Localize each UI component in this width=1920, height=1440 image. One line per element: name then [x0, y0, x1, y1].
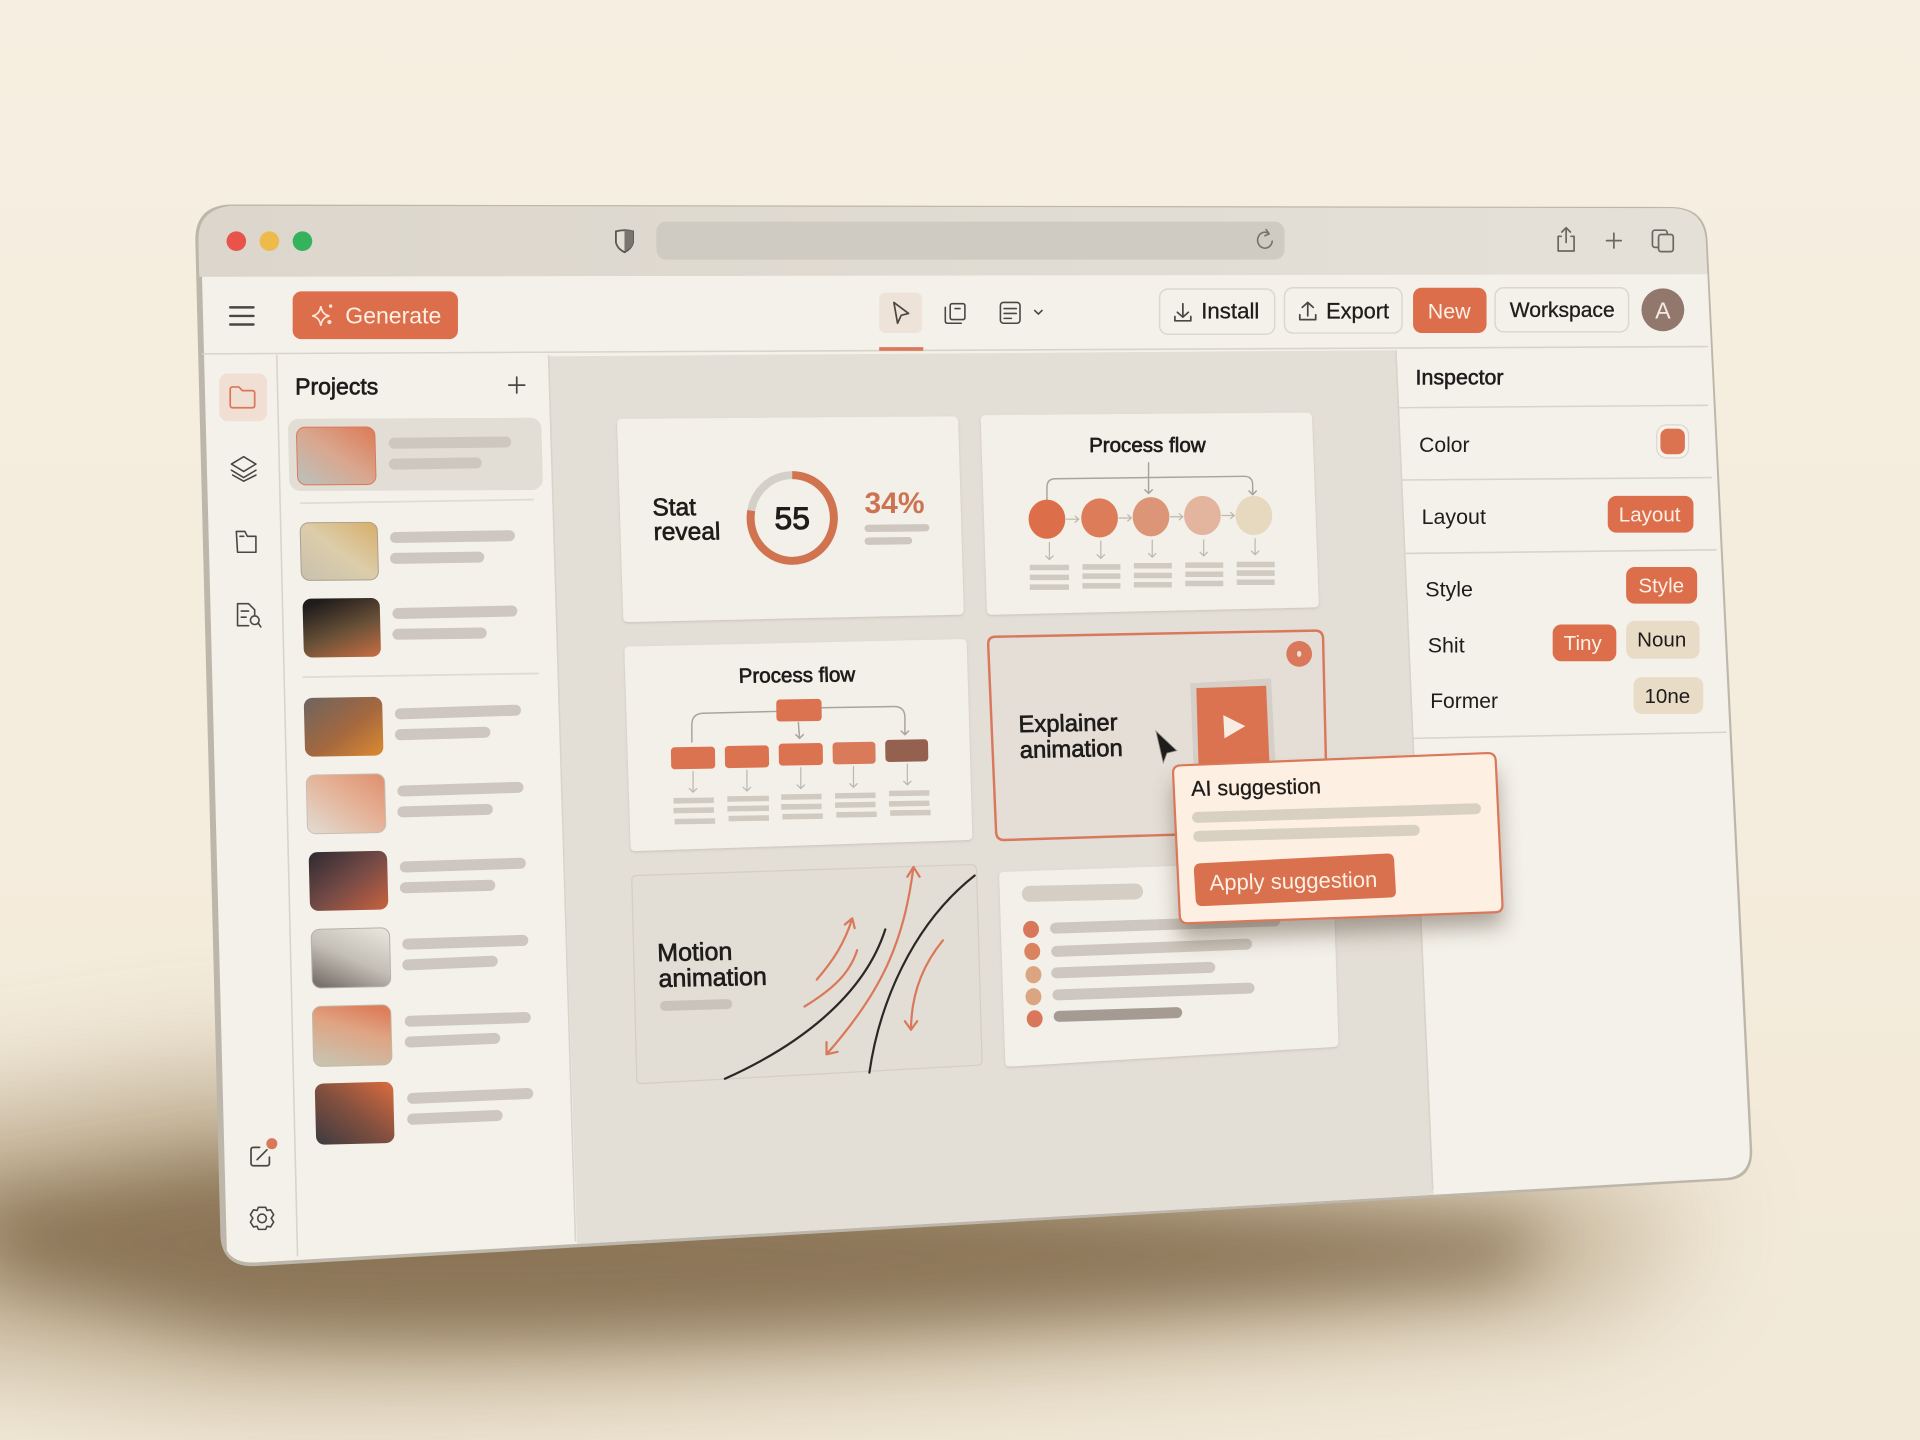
icon: add project: [509, 377, 525, 393]
former row: [1430, 677, 1703, 714]
selected project row: [288, 418, 543, 491]
heading: process flow: Process flow: [1089, 434, 1206, 457]
popup heading: AI suggestion: [1191, 774, 1321, 801]
box arrows: [689, 764, 911, 792]
canvas area: [549, 350, 1435, 1273]
popup shadow: [1173, 771, 1504, 940]
install button: Install: [1201, 298, 1259, 323]
panel dividers: [202, 347, 1727, 1256]
workspace button: [1495, 288, 1629, 332]
popup body: [1173, 753, 1502, 923]
app body: [202, 274, 1753, 1286]
stat reveal label: reveal: [653, 518, 721, 546]
new button: New: [1428, 299, 1471, 323]
layout row: Layout: [1619, 504, 1681, 527]
icon: file search: [238, 604, 261, 627]
video play thumbnail: [1190, 678, 1276, 774]
generate button: Generate: [345, 302, 441, 328]
heading: projects: Projects: [295, 373, 378, 399]
icon: edit with notification: [251, 1138, 277, 1166]
black motion curves: [725, 876, 975, 1079]
motion animation label: animation: [658, 963, 767, 993]
flow arrows: [1046, 512, 1259, 560]
flow text placeholders: [1030, 564, 1275, 587]
apply suggestion button: Apply suggestion: [1209, 867, 1378, 895]
box text placeholders: [673, 793, 931, 822]
apply suggestion button: [1194, 853, 1396, 906]
stat 34 percent: [864, 487, 926, 541]
project item 1: [296, 427, 506, 485]
top node: [776, 699, 822, 722]
icon: layers: [231, 457, 256, 481]
popup: ai suggestion: [1173, 753, 1504, 940]
icon: shield: [616, 230, 633, 252]
card: process flow boxes: [624, 639, 972, 851]
card: motion animation: [632, 864, 982, 1084]
panel: inspector: [1416, 365, 1703, 714]
list lines: [1056, 921, 1275, 1016]
icon: settings gear: [250, 1207, 274, 1229]
flow boxes: [671, 739, 928, 769]
flow nodes: [1029, 496, 1272, 539]
size row: Shit: [1428, 634, 1465, 658]
donut chart 55: [751, 475, 834, 561]
avatar: A: [1655, 297, 1671, 323]
list bullets: [1023, 921, 1043, 1027]
size row: [1428, 621, 1700, 661]
motion animation label: [657, 938, 767, 993]
app window: [184, 196, 1763, 1286]
layout row: [1422, 496, 1693, 533]
tree connectors: [692, 707, 909, 742]
address bar: [656, 222, 1284, 260]
traffic lights: [227, 231, 312, 251]
badge: [1286, 641, 1312, 667]
icon: document dropdown: [1000, 302, 1042, 323]
explainer animation label: animation: [1019, 735, 1123, 764]
project item 4: [304, 697, 516, 757]
stat reveal label: [652, 494, 721, 546]
card: process flow circles: [981, 413, 1319, 615]
connector bracket: [1047, 463, 1256, 500]
icon: share: [1558, 228, 1574, 251]
explainer animation label: [1018, 709, 1123, 764]
caption placeholder: [665, 1004, 727, 1006]
card: list: [999, 861, 1338, 1067]
stat reveal label: Stat: [652, 494, 697, 522]
avatar: [1641, 288, 1684, 331]
icon: new tab plus: [1607, 233, 1621, 248]
heading: process flow: Process flow: [738, 663, 856, 688]
project item 6: [309, 851, 520, 911]
window contents: [184, 196, 1763, 1286]
style row: Style: [1425, 577, 1473, 601]
explainer animation label: Explainer: [1018, 709, 1118, 738]
style row: Style: [1638, 575, 1684, 598]
color row: [1419, 425, 1689, 458]
project item 3: [302, 598, 512, 658]
icon: menu: [230, 307, 253, 324]
project item 9: [315, 1082, 528, 1145]
title bar: [198, 206, 1708, 277]
project item 2: [300, 522, 509, 580]
workspace button: Workspace: [1510, 299, 1615, 322]
window frame: [195, 204, 1752, 1266]
toolbar: [230, 288, 1684, 351]
panel: projects: [288, 373, 543, 1145]
size row: Tiny: [1564, 632, 1602, 655]
former row: Former: [1430, 690, 1498, 713]
icon: copy tabs: [1652, 230, 1673, 252]
export button: Export: [1326, 298, 1389, 323]
new button: [1413, 288, 1487, 333]
stat 34 percent: 34%: [864, 487, 925, 520]
export button: [1284, 288, 1402, 333]
icon rail: [219, 373, 277, 1229]
motion animation label: Motion: [657, 938, 733, 967]
active folder icon: [219, 373, 267, 421]
size row: Noun: [1637, 629, 1686, 652]
icon: file: [236, 531, 256, 552]
orange motion arrows: [804, 867, 943, 1054]
cursor: [1156, 731, 1177, 763]
style row: [1425, 567, 1697, 604]
color row: Color: [1419, 434, 1469, 457]
project item 5: [306, 774, 518, 834]
card: explainer animation: [988, 631, 1327, 840]
icon: frame tool: [945, 304, 965, 323]
project item 8: [312, 1005, 525, 1067]
project item 7: [311, 928, 523, 988]
select tool: [879, 293, 923, 351]
popup text placeholders: [1198, 809, 1476, 836]
icon: reload: [1258, 230, 1272, 248]
donut chart 55: 55: [775, 500, 810, 536]
former row: 10ne: [1644, 685, 1690, 708]
install button: [1160, 289, 1275, 334]
window drop shadow: [0, 1078, 1702, 1379]
heading: inspector: Inspector: [1416, 365, 1504, 389]
layout row: Layout: [1422, 505, 1486, 529]
generate button: [293, 291, 458, 339]
card: stat reveal: [617, 416, 964, 622]
list title placeholder: [1030, 891, 1135, 894]
